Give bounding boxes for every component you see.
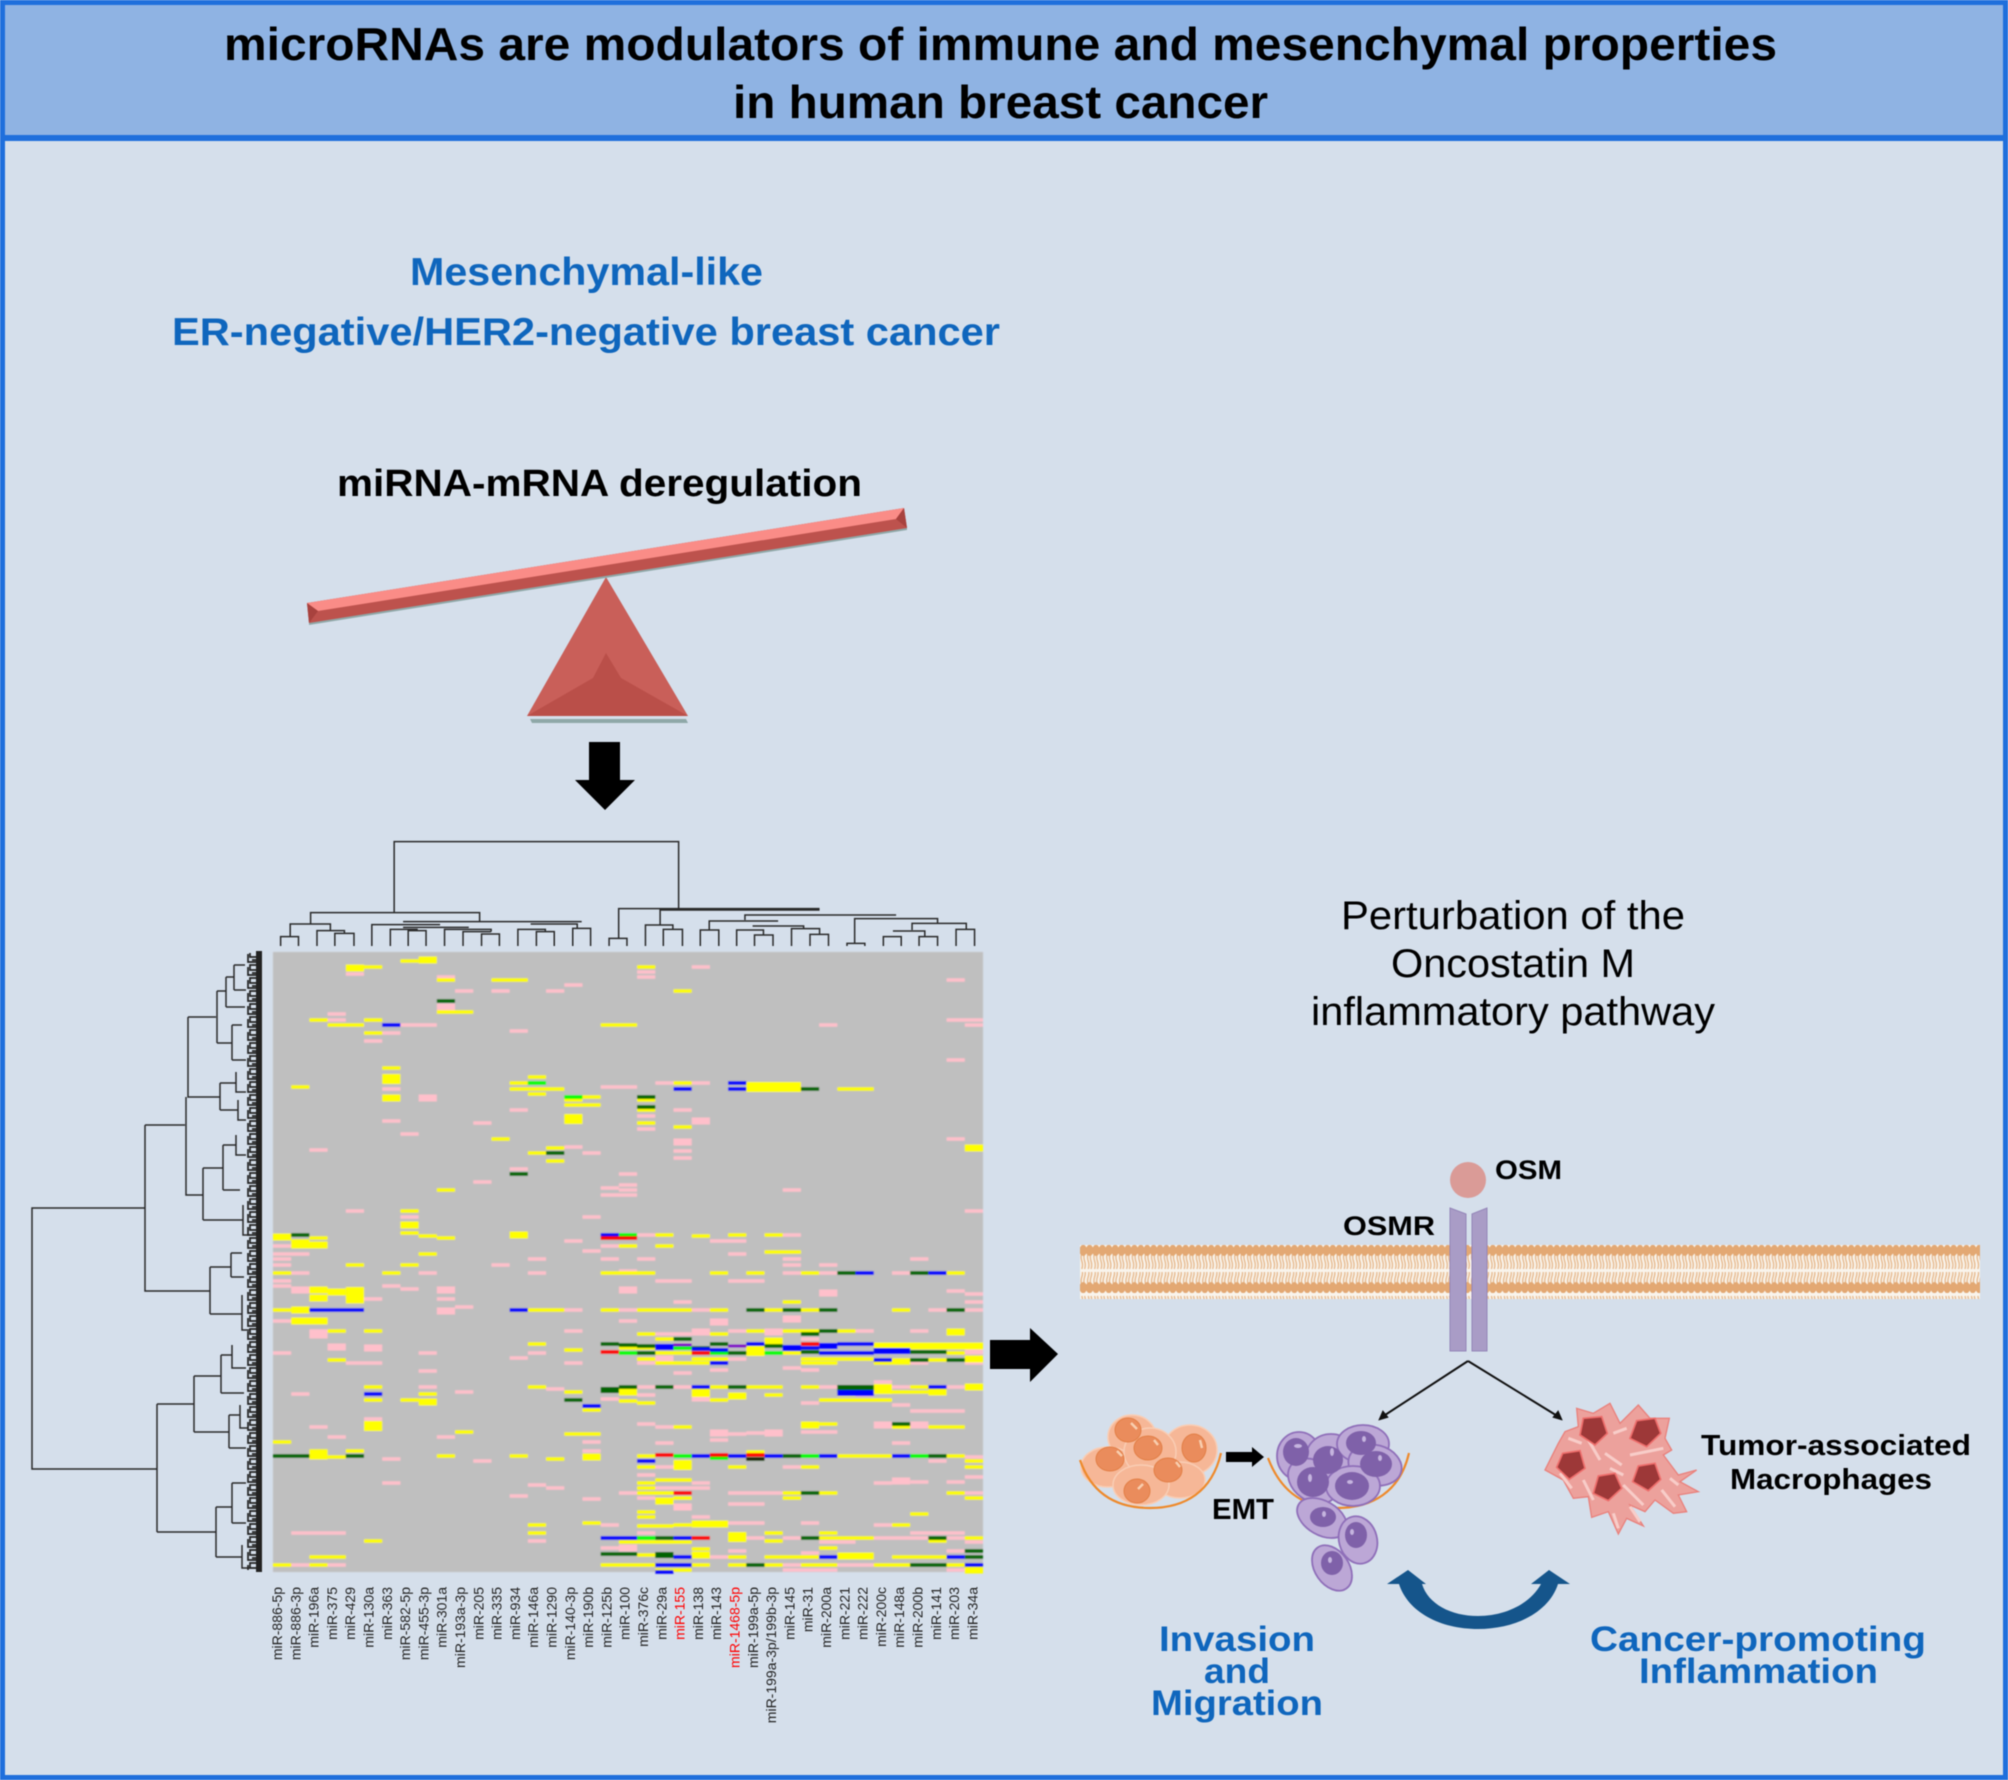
icon: feedback arrow [1387, 1570, 1570, 1629]
arrow: heatmap to pathway [990, 1328, 1058, 1382]
subtype heading [172, 251, 1000, 354]
inflammation label: Inflammation [1639, 1652, 1878, 1691]
miRNA column labels: miR-148a [891, 1587, 907, 1648]
miRNA column labels: miR-100 [617, 1587, 633, 1640]
title banner [5, 5, 2003, 135]
icon: epithelial cells [1080, 1415, 1221, 1508]
miRNA column labels: miR-141 [928, 1587, 944, 1640]
macrophage label: Tumor-associated [1701, 1430, 1971, 1462]
macrophage label [1701, 1430, 1971, 1496]
miRNA column labels: miR-886-5p [269, 1587, 285, 1660]
arrow: EMT [1226, 1447, 1264, 1467]
invasion label: Invasion [1159, 1620, 1315, 1659]
subtype heading: ER-negative/HER2-negative breast cancer [172, 311, 1000, 354]
invasion label: and [1204, 1652, 1270, 1691]
miRNA column labels: miR-222 [855, 1587, 871, 1640]
miRNA column labels: miR-34a [964, 1587, 980, 1640]
miRNA column labels: miR-886-3p [287, 1587, 303, 1660]
title banner: in human breast cancer [733, 76, 1268, 128]
pathway heading: inflammatory pathway [1311, 990, 1715, 1034]
icon: macrophages [1545, 1403, 1698, 1534]
miRNA column labels: miR-221 [836, 1587, 852, 1640]
miRNA column labels: miR-1468-5p [726, 1587, 742, 1668]
signal arrows [1380, 1361, 1561, 1419]
miRNA column labels: miR-199a-3p/199b-3p [763, 1587, 779, 1723]
invasion label [1151, 1620, 1323, 1723]
pathway heading: Perturbation of the [1341, 894, 1685, 938]
miRNA column labels: miR-375 [324, 1587, 340, 1640]
miRNA column labels: miR-200b [910, 1587, 926, 1648]
miRNA column labels: miR-376c [635, 1587, 651, 1647]
icon: seesaw [307, 508, 907, 723]
macrophage label: Macrophages [1730, 1464, 1932, 1496]
miRNA column labels: miR-429 [342, 1587, 358, 1640]
miRNA column labels: miR-146a [525, 1587, 541, 1648]
miRNA column labels: miR-335 [489, 1587, 505, 1640]
OSM label: OSM [1495, 1155, 1562, 1185]
miRNA column labels: miR-205 [470, 1587, 486, 1640]
cell membrane [1080, 1245, 1980, 1299]
miRNA column labels: miR-455-3p [415, 1587, 431, 1660]
inflammation label [1590, 1620, 1926, 1691]
pathway heading [1311, 894, 1715, 1034]
miRNA column labels: miR-200a [818, 1587, 834, 1648]
miRNA column labels: miR-203 [946, 1587, 962, 1640]
miRNA column labels: miR-140-3p [562, 1587, 578, 1660]
inflammation label: Cancer-promoting [1590, 1620, 1926, 1659]
miRNA column labels: miR-31 [800, 1587, 816, 1632]
top dendrogram [281, 842, 975, 946]
miRNA column labels: miR-145 [781, 1587, 797, 1640]
miRNA column labels: miR-363 [379, 1587, 395, 1640]
miRNA column labels: miR-29a [653, 1587, 669, 1640]
miRNA column labels: miR-301a [434, 1587, 450, 1648]
miRNA column labels: miR-143 [708, 1587, 724, 1640]
miRNA column labels: miR-934 [507, 1587, 523, 1640]
OSMR label: OSMR [1343, 1211, 1435, 1241]
icon: mesenchymal cells [1268, 1425, 1409, 1598]
miRNA column labels: miR-1290 [544, 1587, 560, 1648]
OSM receptor [1450, 1208, 1487, 1351]
miRNA column labels: miR-138 [690, 1587, 706, 1640]
miRNA column labels: miR-196a [306, 1587, 322, 1648]
miRNA column labels: miR-125b [598, 1587, 614, 1648]
miRNA column labels [269, 1587, 980, 1723]
miRNA column labels: miR-130a [360, 1587, 376, 1648]
subtype heading: Mesenchymal-like [410, 251, 763, 294]
arrow: down to heatmap [575, 742, 635, 810]
invasion label: Migration [1151, 1684, 1323, 1723]
miRNA column labels: miR-199a-5p [745, 1587, 761, 1668]
miRNA column labels: miR-155 [672, 1587, 688, 1640]
miRNA column labels: miR-200c [873, 1587, 889, 1647]
left dendrogram [32, 951, 262, 1572]
miRNA column labels: miR-193a-3p [452, 1587, 468, 1668]
miRNA column labels: miR-190b [580, 1587, 596, 1648]
heatmap [273, 952, 983, 1572]
title banner: microRNAs are modulators of immune and mesenchymal properties [224, 18, 1777, 70]
deregulation label: miRNA-mRNA deregulation [337, 463, 862, 505]
EMT label: EMT [1212, 1494, 1274, 1526]
OSM ligand [1450, 1162, 1486, 1198]
pathway heading: Oncostatin M [1391, 942, 1635, 986]
miRNA column labels: miR-582-5p [397, 1587, 413, 1660]
